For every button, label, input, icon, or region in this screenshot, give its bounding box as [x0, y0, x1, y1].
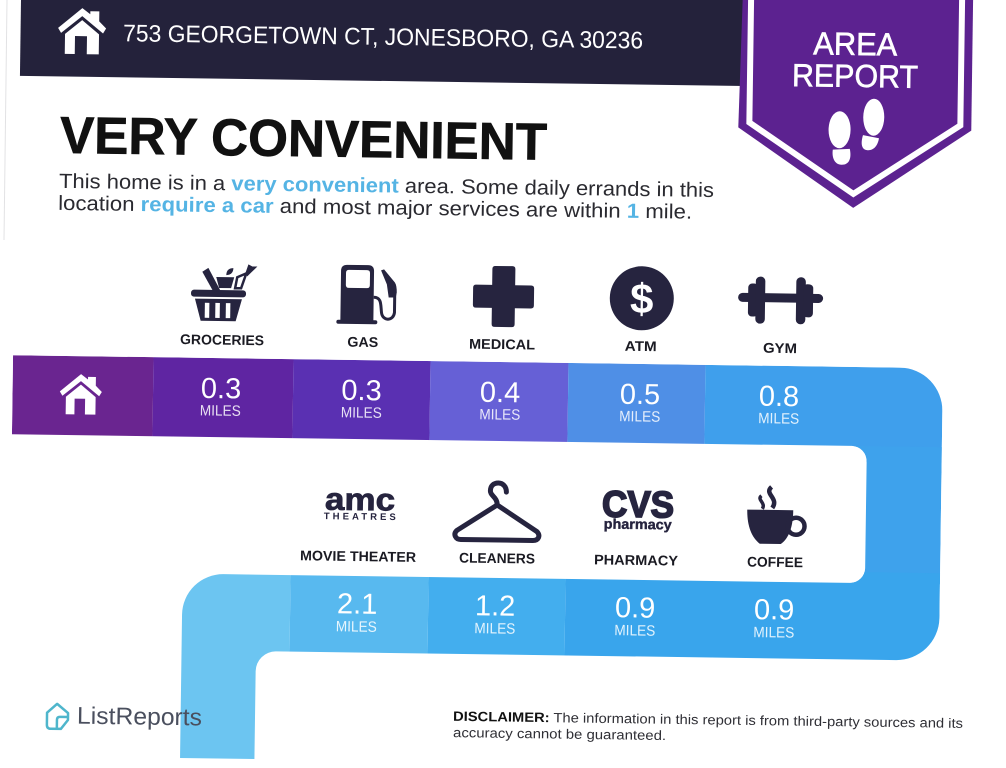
distance: coffee [753, 594, 795, 642]
distance: medical: 0.4 [480, 377, 520, 409]
distance: gym [758, 381, 800, 428]
distance: gym: 0.8 [759, 381, 799, 413]
distance: gym: MILES [758, 410, 799, 428]
badge: area report: AREA [813, 25, 898, 63]
icon: footprints [828, 98, 885, 165]
badge: area report [737, 0, 973, 210]
icon: header house [58, 8, 106, 54]
disclaimer: accuracy cannot be guaranteed. [453, 725, 666, 743]
stop: coffee: COFFEE [747, 553, 803, 570]
stop: gym: GYM [763, 340, 797, 356]
stop: cleaners: CLEANERS [459, 549, 535, 567]
stop: pharmacy: pharmacy [604, 515, 672, 532]
stop: gas: GAS [347, 334, 378, 350]
distance: movie theater: MILES [336, 618, 377, 636]
distance: groceries [200, 373, 241, 420]
distance: cleaners: 1.2 [475, 590, 516, 623]
distance: medical [479, 377, 521, 424]
distance: groceries: 0.3 [201, 373, 241, 405]
distance: gas: 0.3 [341, 375, 382, 407]
distance: coffee: MILES [753, 624, 794, 642]
header bar [20, 0, 971, 89]
stop: atm: $ [630, 275, 654, 322]
stop: movie theater: THEATRES [324, 511, 396, 523]
stop: medical [469, 266, 537, 353]
distance: groceries: MILES [200, 402, 241, 420]
title: VERY CONVENIENT [60, 107, 548, 172]
distance: movie theater: 2.1 [337, 588, 378, 621]
stop: cleaners [454, 482, 540, 567]
distance: gas: MILES [341, 404, 382, 422]
distance: coffee: 0.9 [754, 594, 795, 627]
stop: gas [336, 265, 397, 350]
stop: movie theater [300, 481, 417, 565]
stop: pharmacy [594, 483, 680, 569]
description text [58, 170, 714, 224]
stop: medical: MEDICAL [469, 336, 536, 353]
address text: 753 GEORGETOWN CT, JONESBORO, GA 30236 [123, 20, 643, 54]
distance: pharmacy: 0.9 [615, 592, 656, 625]
description text: location require a car and most major services are within 1 mile. [58, 192, 692, 224]
distance: atm: MILES [619, 408, 660, 426]
distance: cleaners: MILES [474, 620, 515, 638]
stop: coffee [746, 487, 805, 570]
stop: groceries [180, 263, 265, 348]
stop: pharmacy: PHARMACY [594, 551, 679, 569]
distance: atm [619, 379, 661, 426]
distance: medical: MILES [479, 406, 520, 424]
distance: pharmacy: MILES [614, 622, 655, 640]
logo: listreports: ListReports [77, 703, 202, 731]
distance: movie theater [336, 588, 378, 636]
stop: movie theater: MOVIE THEATER [300, 547, 416, 565]
distance: cleaners [474, 590, 516, 638]
distance: pharmacy [614, 592, 656, 640]
icon: ribbon house [60, 374, 102, 415]
stop: gym [737, 276, 823, 357]
disclaimer: DISCLAIMER: The information in this report is from third-party sources and its [453, 709, 963, 731]
route ribbon [0, 340, 959, 768]
stop: movie theater: amc [325, 482, 395, 518]
distance: atm: 0.5 [620, 379, 660, 411]
stop: pharmacy: CVS [602, 483, 674, 525]
stop: atm: ATM [625, 338, 657, 354]
disclaimer [453, 709, 963, 747]
stop: groceries: GROCERIES [180, 331, 264, 348]
stop: atm [609, 266, 674, 354]
distance: gas [341, 375, 382, 422]
description text: This home is in a very convenient area. Some daily errands in this [59, 170, 714, 202]
badge: area report: REPORT [792, 57, 918, 95]
